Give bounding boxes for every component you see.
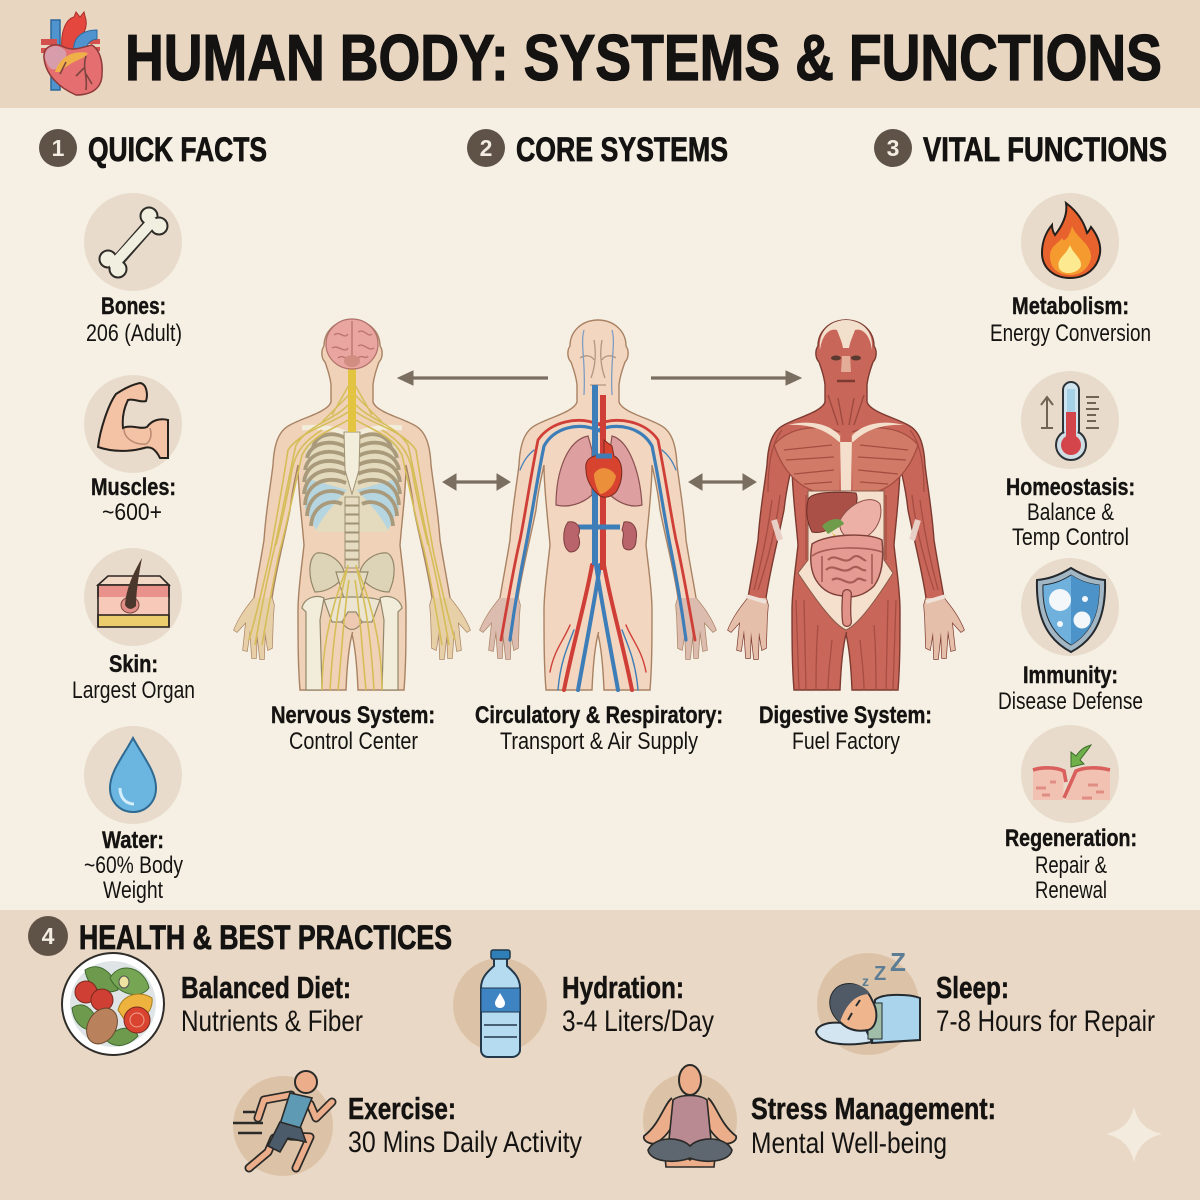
text: regeneration: Repair &	[1035, 852, 1107, 879]
zzz: Z	[890, 947, 906, 977]
panel: vital functions	[990, 193, 1151, 904]
icon: sparkle	[1106, 1107, 1162, 1162]
zzz: z	[862, 973, 869, 989]
heart	[586, 440, 622, 497]
text: water	[84, 827, 183, 904]
text: immunity	[998, 662, 1143, 715]
face	[580, 330, 616, 395]
text: balanced diet	[181, 970, 363, 1038]
kidneys	[564, 522, 636, 552]
icon: skin layers	[84, 548, 182, 646]
gallbladder	[822, 519, 844, 534]
section heading: core systems	[467, 129, 728, 169]
text: muscles: Muscles:	[91, 474, 176, 501]
text: stress management	[751, 1091, 996, 1160]
panel: quick facts	[72, 193, 195, 904]
text: skin: Skin:	[109, 651, 158, 678]
icon: runner	[233, 1071, 333, 1176]
brain	[326, 319, 378, 369]
intestine mass	[811, 535, 883, 597]
section heading: health: HEALTH & BEST PRACTICES	[79, 919, 452, 957]
label: circulatory and respiratory	[475, 702, 723, 755]
icon: bone	[84, 193, 182, 291]
text: balanced diet: Nutrients & Fiber	[181, 1005, 363, 1038]
icon: plate of food	[62, 953, 164, 1055]
lungs	[556, 436, 642, 506]
icon: sleeping person	[816, 947, 920, 1055]
zzz: Z	[874, 963, 886, 985]
icon: meditating person	[643, 1065, 737, 1167]
arrow: circulatory to nervous, upper	[398, 371, 548, 385]
text: homeostasis	[1006, 474, 1135, 551]
section heading: core systems: 2	[480, 135, 492, 161]
spine	[345, 497, 359, 568]
text: immunity: Immunity:	[1023, 662, 1118, 689]
arrow: circulatory and digestive, double	[689, 474, 756, 490]
text: water: Weight	[103, 877, 163, 904]
section heading: health	[28, 916, 452, 957]
zzz	[862, 947, 906, 989]
label: nervous system: Nervous System:	[271, 702, 435, 729]
label: digestive system	[759, 702, 932, 755]
label: digestive system: Digestive System:	[759, 702, 932, 729]
text: regeneration: Renewal	[1035, 877, 1107, 904]
text: regeneration	[1005, 825, 1137, 904]
arrow: circulatory to digestive, upper	[651, 371, 801, 385]
figure: nervous system	[234, 319, 470, 690]
text: stress management: Stress Management:	[751, 1091, 996, 1126]
section heading: quick facts: QUICK FACTS	[88, 131, 267, 169]
stomach	[840, 500, 881, 540]
text: hydration: Hydration:	[562, 970, 684, 1005]
label: nervous system	[271, 702, 435, 755]
text: exercise	[348, 1091, 582, 1159]
text: bones: Bones:	[101, 293, 166, 320]
icon: flexed arm	[84, 375, 182, 473]
section heading: vital functions: 3	[887, 135, 899, 161]
icon: shield	[1021, 558, 1119, 656]
header band	[0, 0, 1200, 108]
text: bones	[86, 293, 182, 347]
label: circulatory and respiratory: Circulatory & Respiratory:	[475, 702, 723, 729]
vessels	[501, 385, 695, 690]
text: metabolism: Metabolism:	[1012, 293, 1129, 320]
text: sleep	[936, 970, 1155, 1038]
icon: skin regeneration	[1021, 725, 1119, 823]
abdominal cavity	[798, 491, 893, 630]
text: exercise: 30 Mins Daily Activity	[348, 1126, 582, 1159]
section heading: health: 4	[42, 923, 55, 949]
text: stress management: Mental Well-being	[751, 1127, 947, 1160]
text: exercise: Exercise:	[348, 1091, 456, 1126]
panel: health and best practices	[0, 910, 1200, 1200]
arrows	[398, 371, 801, 490]
text: homeostasis: Balance &	[1027, 499, 1114, 526]
text: metabolism	[990, 293, 1151, 347]
label: circulatory and respiratory: Transport & Air Supply	[500, 728, 698, 755]
text: homeostasis: Homeostasis:	[1006, 474, 1135, 501]
icon: anatomical heart	[41, 12, 102, 95]
figure: muscular and digestive system	[728, 320, 964, 690]
label: digestive system: Fuel Factory	[792, 728, 900, 755]
text: metabolism: Energy Conversion	[990, 320, 1151, 347]
text: homeostasis: Temp Control	[1012, 524, 1129, 551]
nerves	[249, 362, 455, 690]
text: muscles	[91, 474, 176, 526]
ribcage	[304, 430, 400, 532]
text: hydration: 3-4 Liters/Day	[562, 1005, 714, 1038]
label: nervous system: Control Center	[289, 728, 418, 755]
section heading: core systems: CORE SYSTEMS	[516, 131, 728, 169]
icon: flame	[1021, 193, 1119, 291]
rectum	[841, 594, 852, 622]
text: hydration	[562, 970, 714, 1038]
figure: circulatory and respiratory system	[480, 320, 716, 690]
text: sleep: 7-8 Hours for Repair	[936, 1005, 1155, 1038]
text: bones: 206 (Adult)	[86, 320, 182, 347]
text: immunity: Disease Defense	[998, 688, 1143, 715]
panel: core systems	[234, 319, 964, 755]
section heading: quick facts: 1	[52, 135, 65, 161]
text: skin: Largest Organ	[72, 677, 195, 704]
icon: thermometer	[1021, 371, 1119, 469]
text: balanced diet: Balanced Diet:	[181, 970, 351, 1005]
head and face	[820, 320, 872, 425]
bones: pelvis and femurs	[302, 553, 402, 690]
text: skin	[72, 651, 195, 704]
sternum and clavicles	[302, 427, 402, 494]
text: water: Water:	[102, 827, 164, 854]
text: regeneration: Regeneration:	[1005, 825, 1137, 852]
muscles	[746, 423, 946, 690]
text: water: ~60% Body	[84, 852, 183, 879]
text: muscles: ~600+	[102, 499, 162, 526]
icon: water drop	[84, 726, 182, 824]
arrow: nervous and circulatory, double	[443, 474, 510, 490]
section heading: quick facts	[39, 129, 267, 169]
text: sleep: Sleep:	[936, 970, 1009, 1005]
icon: water bottle	[453, 950, 547, 1057]
liver	[807, 492, 857, 532]
